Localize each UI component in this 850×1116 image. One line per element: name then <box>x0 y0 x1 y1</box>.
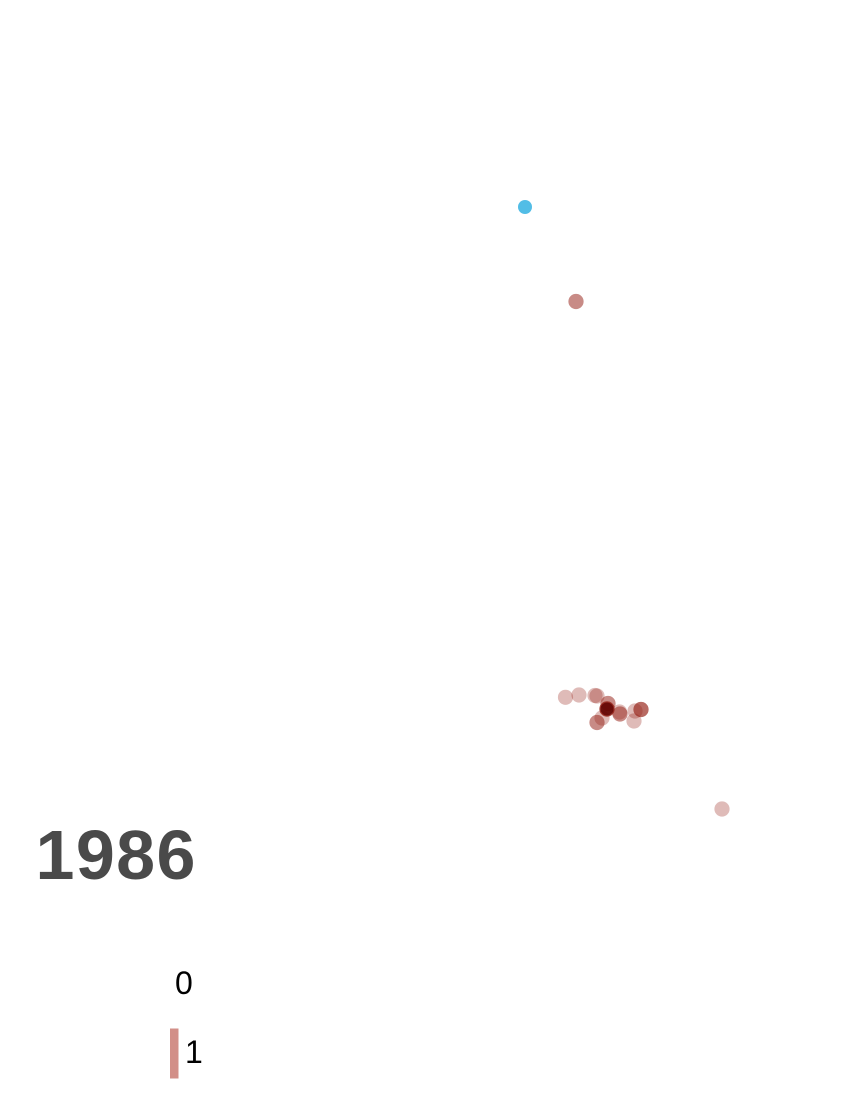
northern red marker <box>568 294 584 309</box>
blue marker <box>518 200 532 214</box>
legend label 1: 1 <box>185 1034 203 1070</box>
southern red marker <box>714 801 730 817</box>
legend bar <box>170 1028 178 1078</box>
central cluster of red markers <box>558 687 649 730</box>
legend <box>170 965 203 1078</box>
legend label 0: 0 <box>175 965 193 1001</box>
year label: 1986 <box>36 816 197 894</box>
